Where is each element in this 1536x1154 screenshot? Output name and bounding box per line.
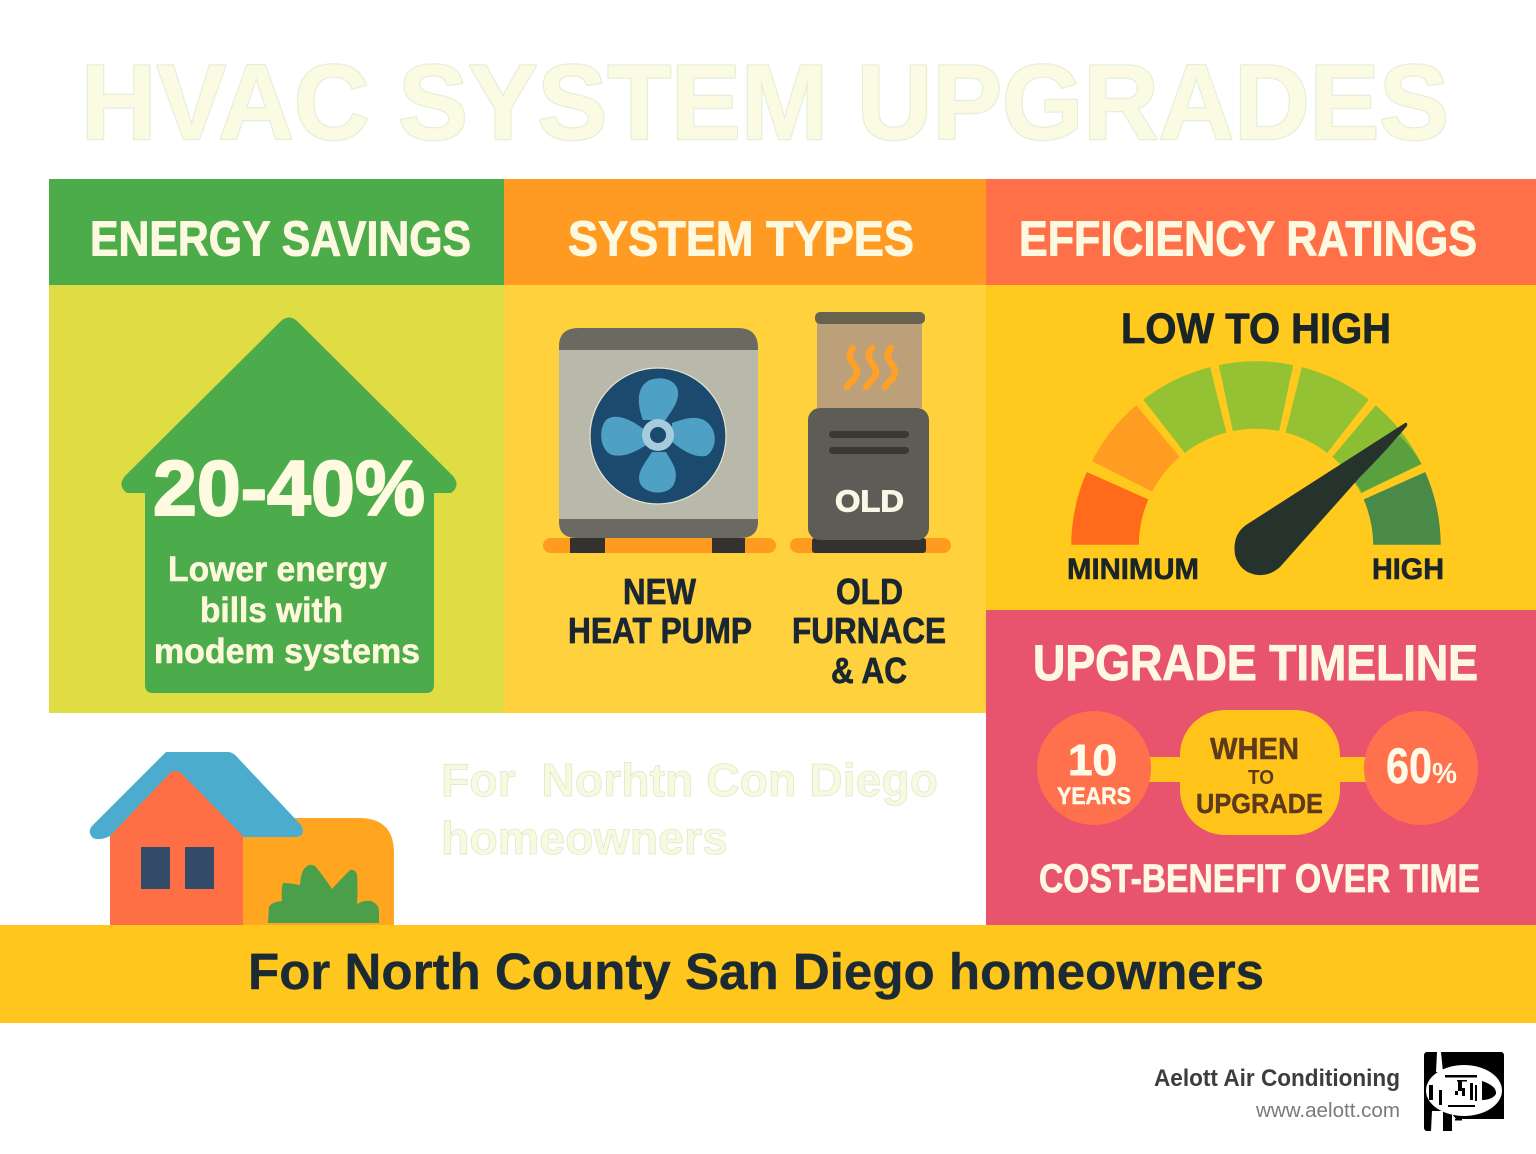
timeline heading: UPGRADE TIMELINE — [1033, 635, 1478, 691]
box: when to upgrade: WHEN — [1210, 731, 1299, 766]
box: when to upgrade — [1180, 710, 1340, 835]
label: old furnace and AC — [792, 571, 946, 691]
gauge label: high: HIGH — [1372, 553, 1444, 586]
footer company name: Aelott Air Conditioning — [1154, 1065, 1400, 1092]
label: old furnace and AC: OLD — [836, 571, 903, 612]
gauge chart — [1070, 360, 1442, 575]
footer website: www.aelott.com — [1255, 1100, 1400, 1122]
title: HVAC SYSTEM UPGRADES — [81, 42, 1449, 162]
efficiency ratings header: EFFICIENCY RATINGS — [1019, 212, 1477, 266]
system types header — [504, 179, 986, 285]
efficiency ratings header — [986, 179, 1536, 285]
bottom banner — [0, 925, 1536, 1023]
gauge label: minimum: MINIMUM — [1067, 553, 1199, 586]
circle: 10 years: YEARS — [1057, 783, 1131, 810]
icon: house illustration — [90, 752, 394, 925]
circle: 60 percent — [1364, 711, 1478, 825]
label: new heat pump: HEAT PUMP — [568, 610, 752, 651]
savings description: bills with — [200, 591, 343, 630]
system types header: SYSTEM TYPES — [568, 212, 914, 266]
label: old furnace and AC: FURNACE — [792, 610, 946, 651]
panel: system types — [504, 179, 986, 713]
circle: 10 years: 10 — [1068, 736, 1117, 785]
savings description — [154, 550, 420, 671]
energy savings header: ENERGY SAVINGS — [90, 212, 471, 266]
icon: new heat pump — [543, 328, 776, 553]
energy savings header — [49, 179, 504, 285]
timeline connector — [1145, 757, 1370, 782]
logo — [1424, 1052, 1504, 1131]
icon: old furnace: OLD — [835, 484, 904, 518]
icon: old furnace — [790, 312, 951, 553]
box: when to upgrade: UPGRADE — [1196, 788, 1323, 819]
panel: energy savings — [49, 179, 504, 713]
bottom banner: For North County San Diego homeowners — [248, 943, 1264, 1000]
savings percentage: 20-40% — [153, 444, 425, 532]
label: new heat pump — [568, 571, 752, 651]
faded subtitle: For Norhtn Con Diego — [441, 754, 938, 806]
circle: 60 percent: 60 — [1386, 738, 1432, 794]
gauge heading: LOW TO HIGH — [1121, 305, 1391, 353]
faded subtitle — [441, 754, 938, 864]
icon: green house with savings figure — [121, 318, 457, 693]
circle: 60 percent: % — [1432, 758, 1457, 790]
circle: 10 years — [1037, 711, 1151, 825]
savings description: modem systems — [154, 632, 420, 671]
box: when to upgrade: TO — [1248, 767, 1274, 789]
panel: upgrade timeline — [986, 610, 1536, 925]
label: old furnace and AC: & AC — [831, 650, 907, 691]
faded subtitle: homeowners — [441, 812, 728, 864]
panel: efficiency ratings — [986, 179, 1536, 610]
label: new heat pump: NEW — [623, 571, 696, 612]
savings description: Lower energy — [168, 550, 388, 589]
gauge needle — [1234, 423, 1407, 575]
